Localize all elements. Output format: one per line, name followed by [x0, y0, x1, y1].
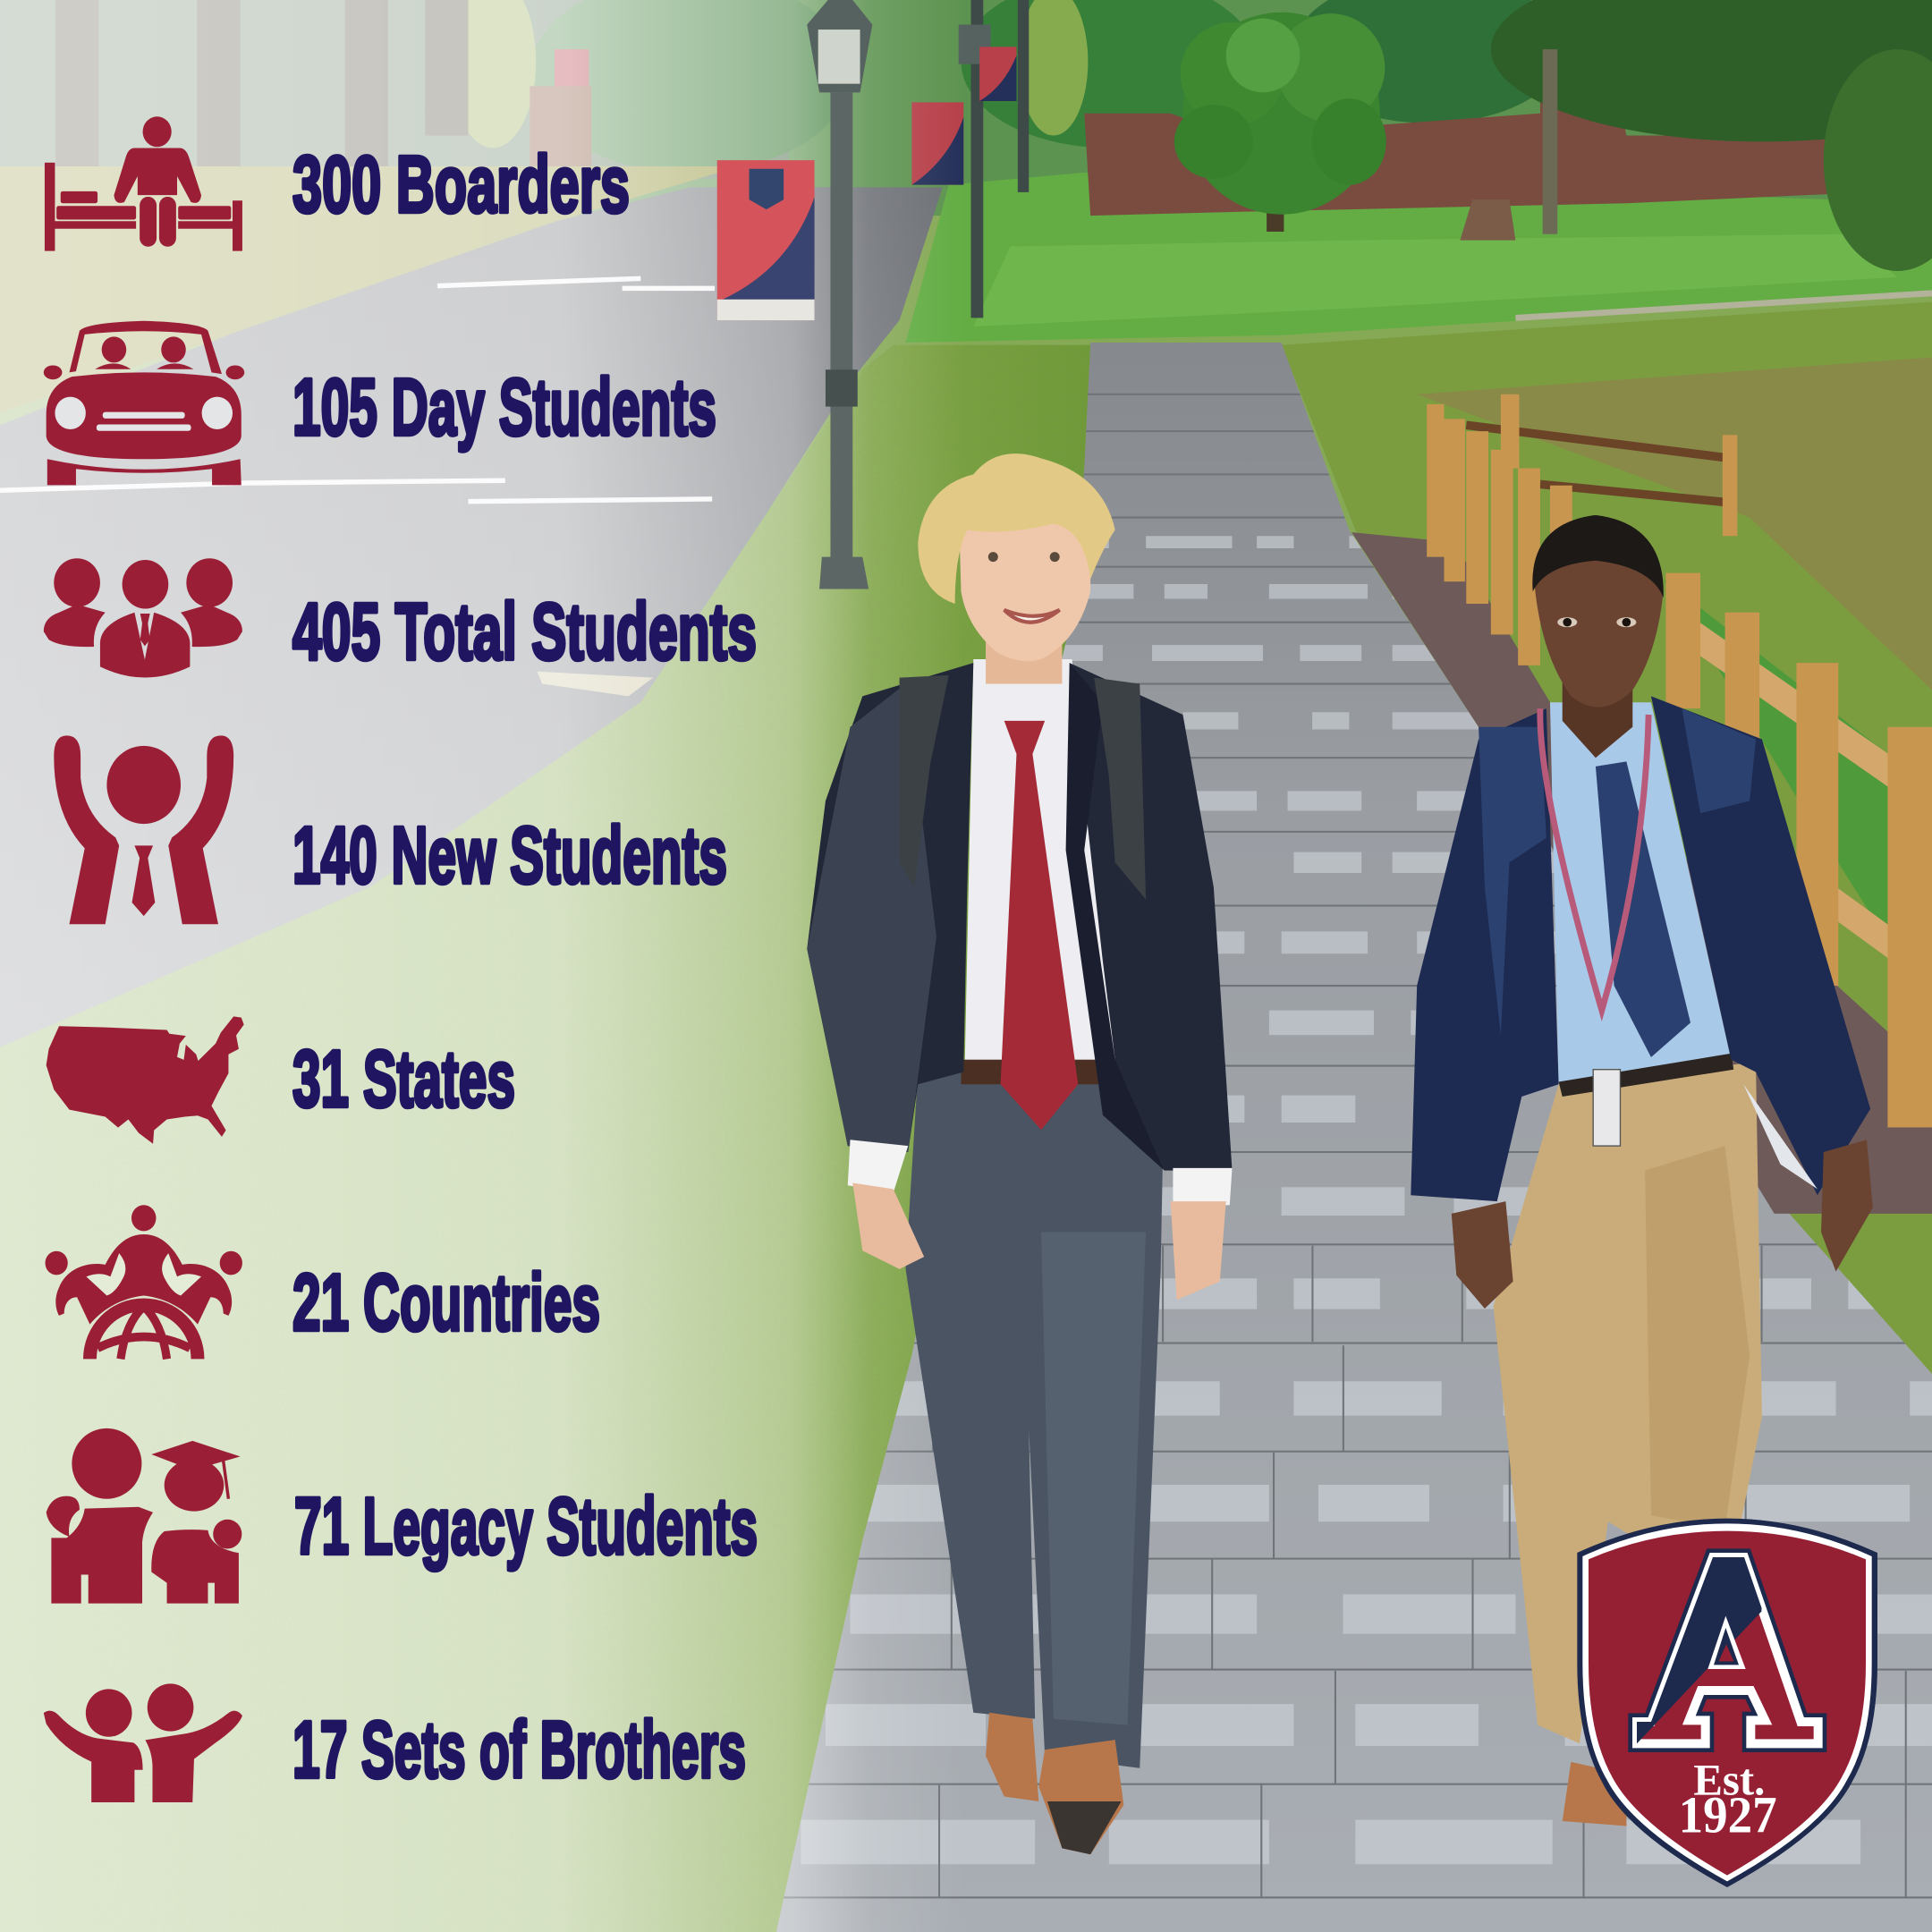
khaki trousers — [1494, 1062, 1762, 1743]
walkway pavers — [740, 333, 1932, 1932]
trees behind the campus — [0, 0, 1932, 265]
stat icon: brothers — [44, 1683, 242, 1802]
stat label: boarders: 300 Boarders — [292, 140, 630, 230]
left grass — [699, 345, 1090, 1827]
neck — [1563, 665, 1632, 758]
neck — [986, 629, 1062, 684]
wooden fence — [1427, 394, 1932, 1127]
overhanging canopy — [1460, 0, 1932, 271]
brick wall — [1084, 25, 1897, 216]
hair — [918, 453, 1115, 604]
stat label: brothers: 17 Sets of Brothers — [292, 1706, 746, 1795]
boy on the right — [1411, 515, 1873, 1826]
shirt — [965, 659, 1117, 1066]
blazer — [807, 663, 1233, 1171]
hands — [1452, 1201, 1513, 1309]
shoe — [1563, 1762, 1626, 1826]
stat icon: new students hands — [54, 735, 233, 924]
face — [959, 505, 1090, 661]
rear lamp posts and banners — [911, 0, 1029, 318]
boy on the left — [807, 453, 1233, 1854]
stat label: legacy students: 71 Legacy Students — [294, 1482, 758, 1572]
upper lawn — [905, 173, 1932, 343]
road — [0, 187, 943, 1047]
backpack straps — [900, 675, 1146, 900]
school crest logo: 1927 — [1679, 1785, 1777, 1843]
cuffs — [848, 1140, 1233, 1208]
crest text: Est. 1927: Est. — [1693, 1755, 1765, 1805]
stat label: day students: 105 Day Students — [292, 363, 716, 453]
hair — [1532, 515, 1664, 597]
stat label: states: 31 States — [292, 1035, 515, 1124]
stat label: countries: 21 Countries — [292, 1258, 600, 1348]
tie — [1001, 721, 1078, 1130]
stat icon: countries globe with people — [46, 1205, 242, 1359]
belt — [1559, 1054, 1733, 1097]
light blue shirt — [1550, 702, 1731, 1084]
school crest logo — [1577, 1519, 1877, 1887]
crest letter A — [1637, 1557, 1818, 1743]
stat icon: USA map — [47, 1016, 244, 1144]
front lamp post and banner — [717, 0, 872, 589]
navy blazer — [1411, 696, 1870, 1201]
stat icon: total students group — [44, 558, 242, 678]
belt — [961, 1060, 1127, 1084]
lanyard and id — [1540, 708, 1648, 1146]
right lawn — [1282, 301, 1932, 1380]
hands — [852, 1182, 924, 1269]
mulch strip — [1352, 532, 1932, 1214]
stat label: new students: 140 New Students — [292, 811, 727, 901]
stat icon: day students car — [44, 321, 244, 485]
shoes — [986, 1713, 1038, 1801]
stat icon: boarders — [45, 116, 242, 251]
left verge — [0, 166, 740, 412]
navy tie — [1596, 761, 1690, 1057]
stat icon: legacy parent and graduate — [47, 1428, 242, 1604]
tree — [1174, 13, 1386, 232]
face — [1534, 542, 1664, 708]
stat label: total students: 405 Total Students — [292, 588, 757, 677]
trousers — [905, 1072, 1165, 1768]
